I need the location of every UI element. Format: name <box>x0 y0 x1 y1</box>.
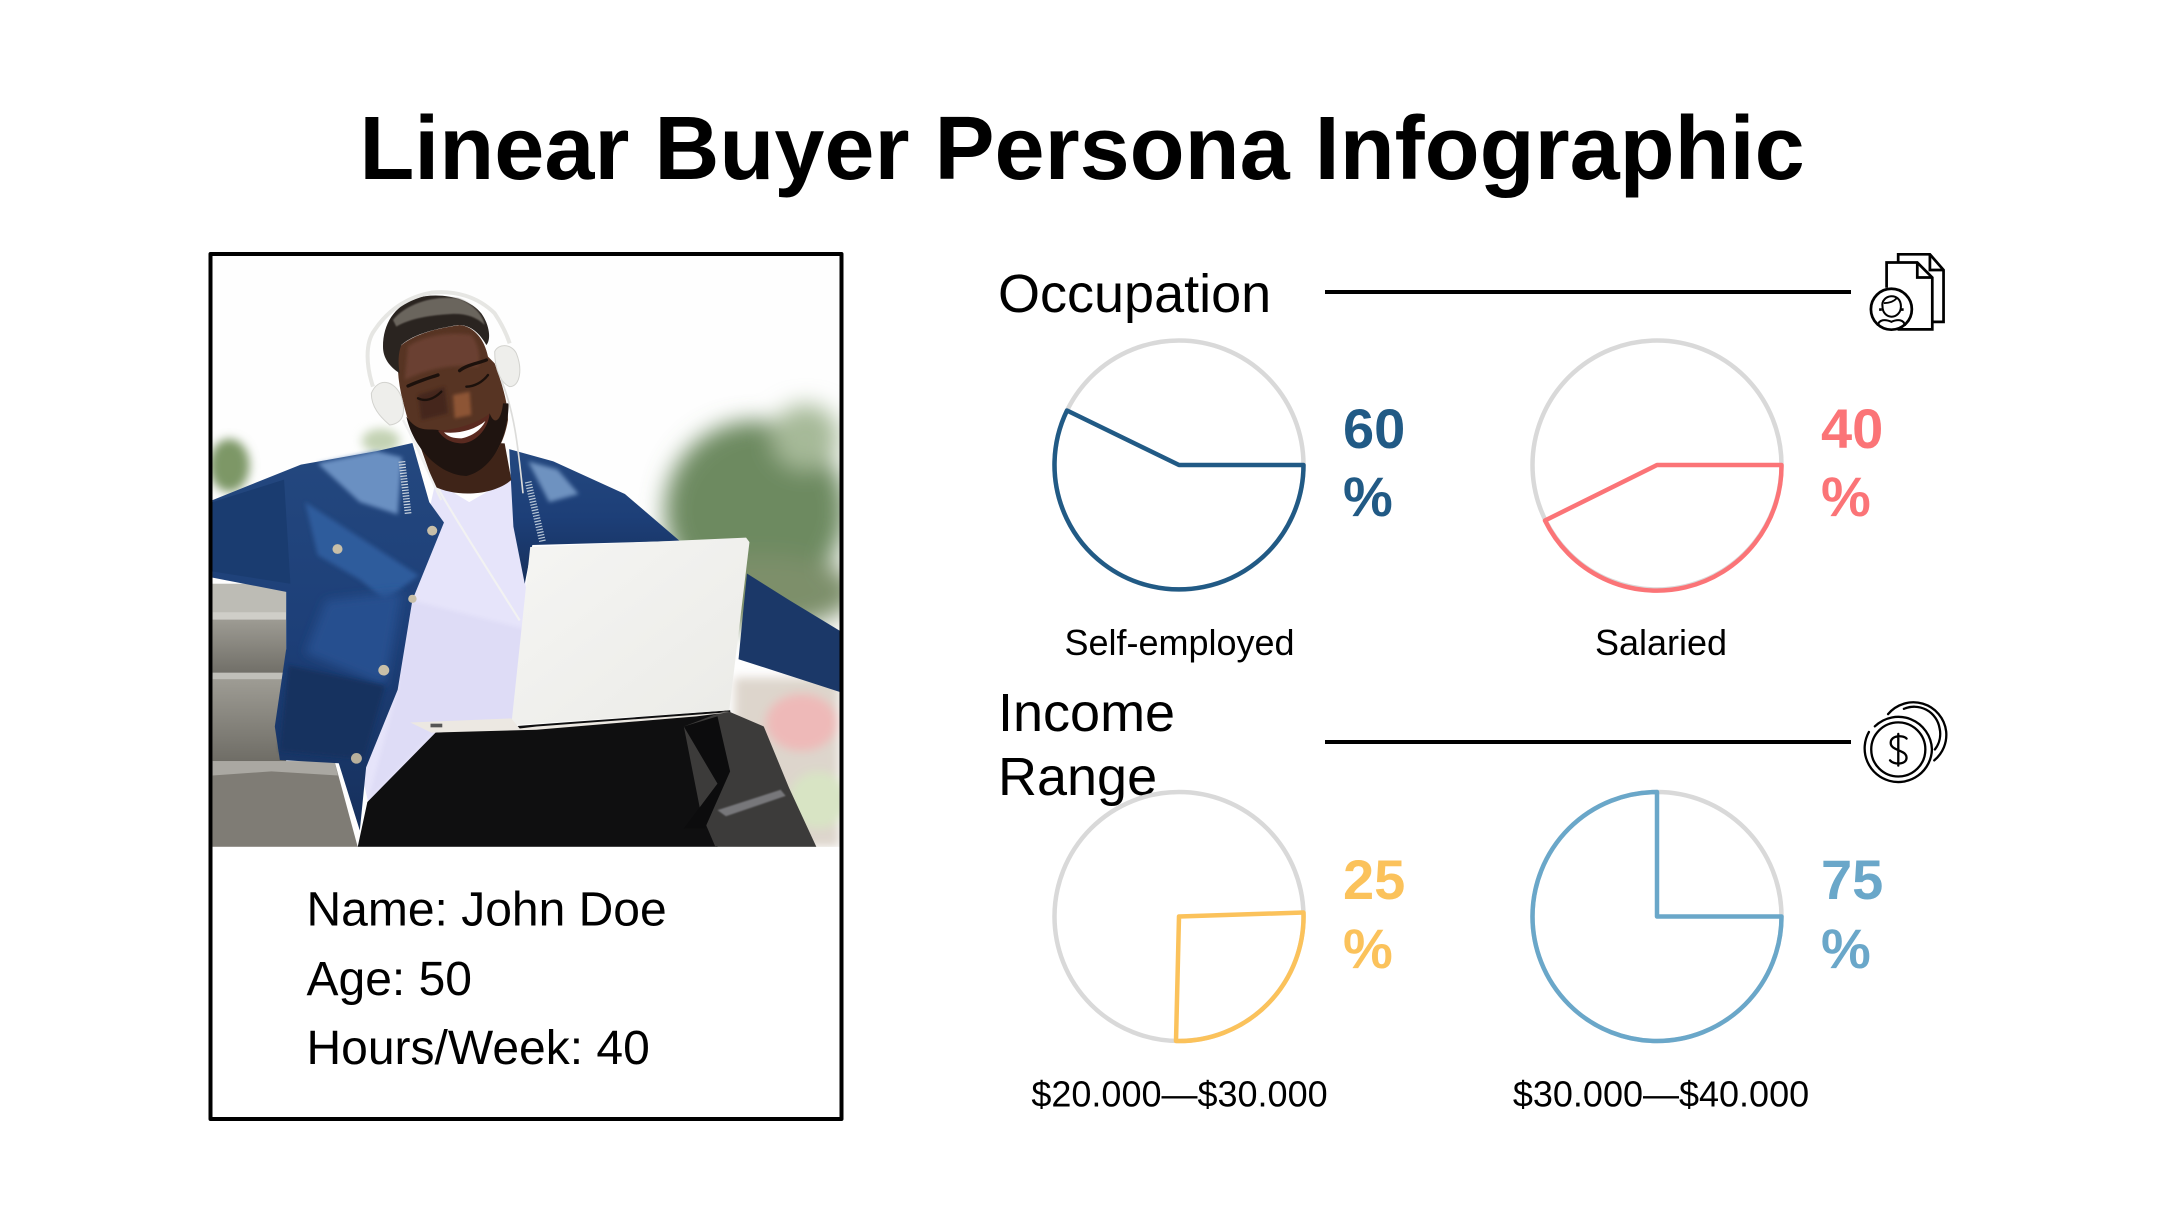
cables <box>501 380 523 493</box>
panel: occupation <box>998 254 1944 663</box>
header line <box>1325 740 1851 744</box>
pie: self-employed 60% <box>1054 340 1304 590</box>
trees <box>665 404 856 629</box>
card border <box>210 254 842 1119</box>
pie: salaried 40% <box>1532 340 1782 591</box>
value: 25%: 25 <box>1343 848 1405 911</box>
value: 60%: 60 <box>1343 397 1405 460</box>
label: salaried: Salaried <box>1595 622 1727 663</box>
pie: $30.000–$40.000 75% <box>1532 792 1782 1041</box>
value: 75%: % <box>1821 917 1871 980</box>
heading: income range: Income <box>998 683 1175 743</box>
heading: occupation: Occupation <box>998 264 1271 324</box>
value: 40%: 40 <box>1821 397 1883 460</box>
denim jacket <box>213 437 840 831</box>
heading: income range: Range <box>998 747 1157 807</box>
persona details: Name: John Doe <box>306 884 667 936</box>
persona details <box>306 884 667 1075</box>
label: $20.000—$30.000: $20.000—$30.000 <box>1031 1074 1328 1114</box>
persona details: Hours/Week: 40 <box>306 1022 650 1075</box>
t-shirt <box>362 478 526 802</box>
label: $30.000—$40.000: $30.000—$40.000 <box>1513 1074 1809 1114</box>
icon: documents with person <box>1871 254 1944 330</box>
mouth <box>438 413 490 443</box>
heading: income range <box>998 683 1175 807</box>
brows and eyes <box>408 360 488 400</box>
beard <box>406 403 509 476</box>
photo: man with laptop on steps <box>209 257 856 847</box>
face <box>398 325 508 475</box>
value: 60% <box>1343 397 1405 528</box>
stone steps <box>213 584 358 847</box>
panel: persona card <box>209 254 856 1119</box>
pie: $20.000–$30.000 25% <box>1054 792 1304 1041</box>
header line <box>1325 290 1851 294</box>
value: 25%: % <box>1343 917 1393 980</box>
label: self-employed: Self-employed <box>1064 622 1295 663</box>
value: 40%: % <box>1821 465 1871 528</box>
value: 40% <box>1821 397 1883 528</box>
value: 60%: % <box>1343 465 1393 528</box>
blurred background right bottom <box>734 678 848 847</box>
value: 75%: 75 <box>1821 848 1883 911</box>
hair <box>383 295 489 373</box>
trousers <box>358 710 816 847</box>
value: 75% <box>1821 848 1883 980</box>
laptop <box>410 538 749 733</box>
headphone band and cups <box>368 292 520 425</box>
panel: income range <box>998 683 1946 1114</box>
head with headphones <box>368 292 523 500</box>
icon: coins <box>1865 702 1946 782</box>
title: Linear Buyer Persona Infographic <box>359 99 1805 199</box>
value: 25% <box>1343 848 1405 980</box>
persona details: Age: 50 <box>306 953 472 1006</box>
